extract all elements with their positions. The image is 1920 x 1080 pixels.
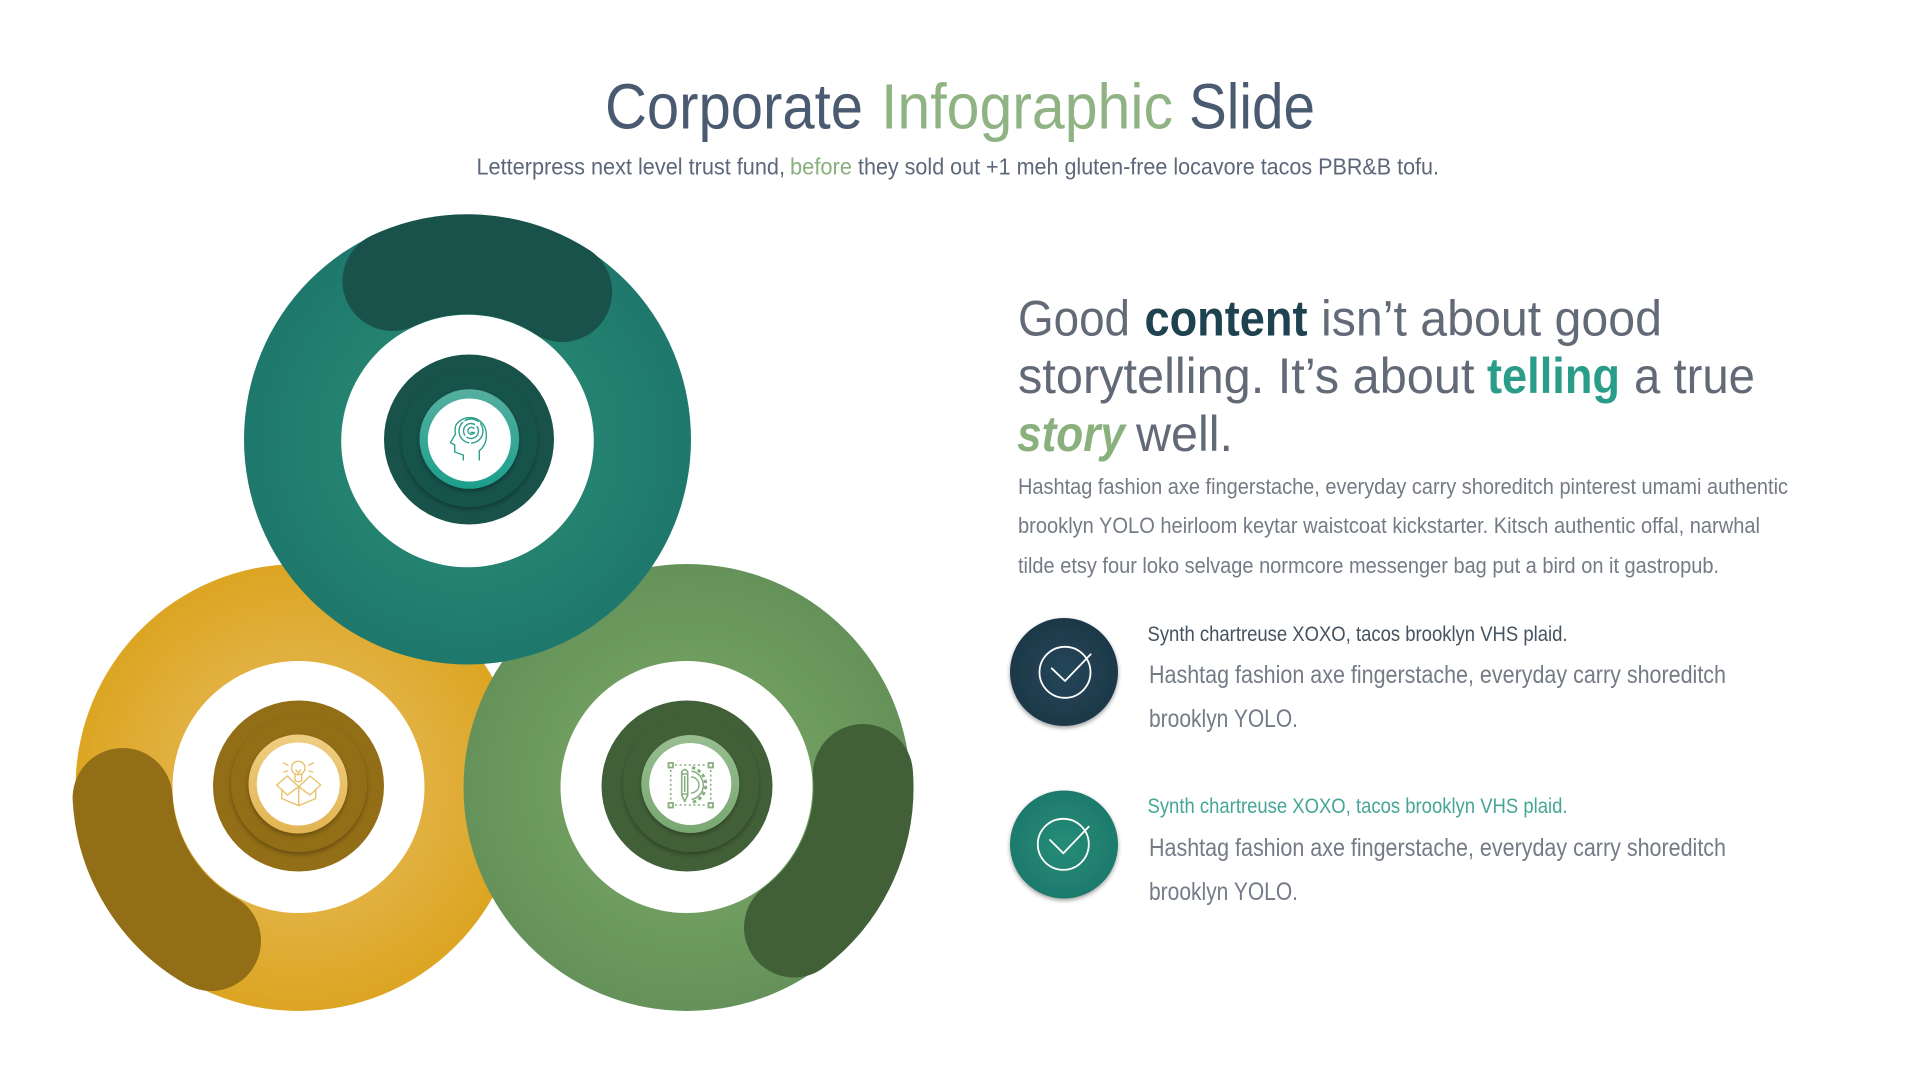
teal white hole — [341, 315, 594, 567]
teal core — [384, 354, 554, 524]
heading line 2: storytelling. It’s about — [1018, 348, 1475, 404]
item 1 text: brooklyn YOLO. — [1149, 705, 1298, 733]
item 1 text: Synth chartreuse XOXO, tacos brooklyn VHS plaid. — [1148, 623, 1568, 646]
teal dark arc — [392, 264, 562, 292]
subtitle: they sold out +1 meh gluten-free locavore tacos PBR&B tofu. — [858, 154, 1439, 180]
badge: teal check — [1010, 790, 1118, 898]
item 2 text: Synth chartreuse XOXO, tacos brooklyn VHS plaid. — [1148, 795, 1568, 818]
teal outer ring — [244, 214, 691, 664]
item 2 text: Hashtag fashion axe fingerstache, everyday carry shoreditch — [1149, 834, 1726, 862]
heading line 3 — [1017, 406, 1233, 462]
icon: pencil and gear — [668, 763, 713, 808]
title: Slide — [1189, 70, 1315, 142]
green dark arc — [794, 774, 864, 928]
heading line 3: well. — [1135, 406, 1233, 462]
icon: check in circle — [1038, 819, 1089, 870]
subtitle: Letterpress next level trust fund, — [476, 154, 785, 180]
title: Infographic — [881, 70, 1173, 142]
title — [605, 70, 1315, 142]
icon: head with maze — [450, 418, 486, 460]
icon: light bulb in box — [277, 761, 321, 806]
green white hole — [560, 661, 812, 913]
panel: gold ring — [76, 564, 522, 1011]
badge: dark check — [1010, 618, 1118, 726]
heading line 1 — [1018, 290, 1662, 346]
gold dark arc — [123, 798, 211, 941]
gold outer ring — [76, 564, 522, 1011]
heading line 2: telling — [1487, 348, 1620, 404]
icon: check in circle — [1040, 647, 1091, 698]
item 1 text: Hashtag fashion axe fingerstache, everyday carry shoreditch — [1149, 661, 1726, 689]
panel: green ring — [464, 564, 910, 1011]
green core — [602, 700, 772, 872]
heading line 1: Good — [1018, 290, 1130, 346]
heading — [1017, 290, 1755, 462]
gold white hole — [172, 661, 424, 913]
heading line 1: isn’t about good — [1321, 290, 1662, 346]
title: Corporate — [605, 70, 863, 142]
subtitle — [476, 154, 1439, 180]
heading line 3: story — [1017, 406, 1127, 462]
paragraph: tilde etsy four loko selvage normcore messenger bag put a bird on it gastropub. — [1018, 553, 1719, 578]
gold core — [213, 700, 384, 872]
paragraph: Hashtag fashion axe fingerstache, everyday carry shoreditch pinterest umami authentic — [1018, 474, 1788, 499]
heading line 2 — [1018, 348, 1755, 404]
subtitle: before — [790, 154, 852, 180]
panel: teal ring — [244, 214, 691, 664]
heading line 2: a true — [1634, 348, 1755, 404]
item 1 text — [1148, 623, 1726, 733]
item 2 text — [1148, 795, 1726, 906]
paragraph: brooklyn YOLO heirloom keytar waistcoat kickstarter. Kitsch authentic offal, narwhal — [1018, 513, 1760, 538]
paragraph — [1018, 474, 1788, 578]
green outer ring — [464, 564, 910, 1011]
item 2 text: brooklyn YOLO. — [1149, 878, 1298, 906]
heading line 1: content — [1144, 290, 1308, 346]
